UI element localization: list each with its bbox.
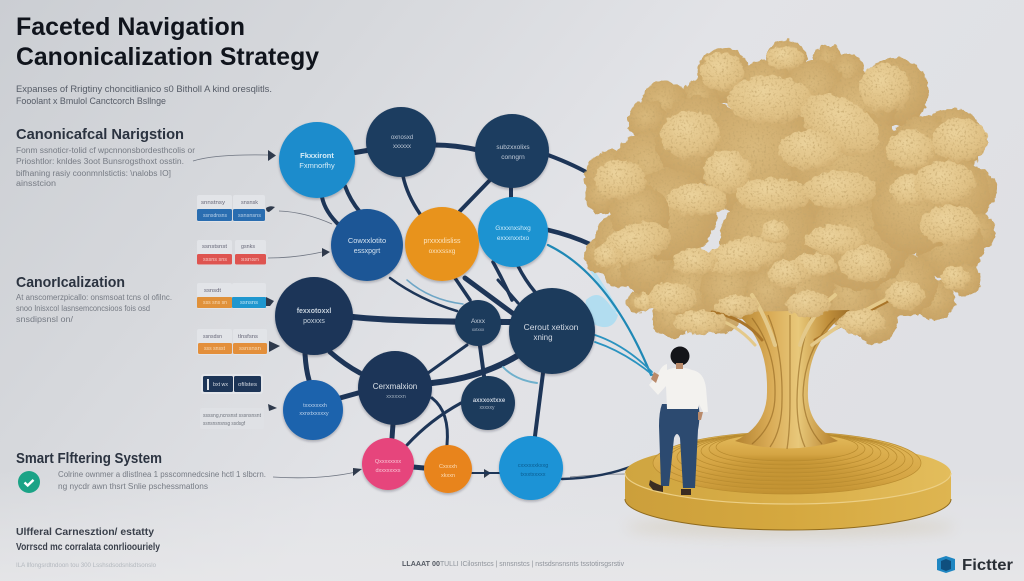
card: orange and blue: ssnsdt (204, 288, 222, 294)
card: red: ssnsn (241, 257, 259, 263)
tree base (625, 432, 955, 537)
node (279, 122, 355, 198)
logo: Fictter (962, 557, 1013, 574)
subtitle (16, 84, 272, 107)
node (424, 445, 472, 493)
card: orange: ssnsdsn (203, 334, 222, 340)
footer note: ILA llfongsrdtndoon tou 300 Lsshsdsodsnlsdtsonslo (16, 563, 157, 569)
node: Fkxxiront (300, 151, 334, 160)
node: subzxxolixs (496, 144, 530, 151)
bottom caption: LLAAAT 00 (402, 561, 440, 568)
card: orange and blue: ssnsns (240, 300, 259, 306)
node: axxxoxtxxe (473, 398, 506, 404)
node: xning (533, 333, 553, 342)
node: Cerxmalxion (373, 382, 417, 391)
card: orange and blue: sss sns sn (203, 300, 227, 306)
node (275, 277, 353, 355)
section: smart filtering system (16, 450, 266, 493)
node: poxxxs (303, 318, 325, 325)
body text: Prioshtlor: knldes 3oot Bunsrogsthoxt osstin. (16, 157, 184, 166)
base rings (653, 432, 921, 494)
blue data streams (407, 245, 654, 383)
node: xxxxxxn (386, 394, 406, 400)
canopy foreground lumps (594, 46, 988, 335)
network connections (305, 145, 646, 479)
canopy branches (710, 295, 900, 345)
card: blue: ssnsnsns (238, 213, 262, 219)
card: orange and blue (197, 283, 266, 309)
node: Cowxxlotito (348, 236, 386, 245)
card: orange (197, 329, 267, 355)
card: red (197, 240, 266, 265)
node (509, 288, 595, 374)
person (649, 346, 708, 495)
node: xxxxxy (480, 405, 495, 411)
body text: snoo Inisxcol Iasnsemconcsioos fois osd (16, 304, 150, 313)
node (366, 107, 436, 177)
tree (584, 40, 997, 537)
card: red: gsnks (241, 244, 256, 250)
icon: check badge (18, 471, 40, 493)
node: prxxxxlisliss (424, 238, 461, 245)
node (461, 376, 515, 430)
subtitle: Expanses of Rrigtiny choncitlianico s0 Bitholl A kind oresqlitls. (16, 84, 272, 95)
node: xxnxtxxxxxy (299, 411, 329, 417)
canopy back mass (584, 40, 997, 344)
node: oxnosxd (391, 135, 413, 141)
card: blue: snsnsk (241, 200, 259, 206)
footer note: Vorrscd mc corralata conrlioouriely (16, 541, 160, 553)
node: Qxxxxxxxx (375, 459, 401, 465)
callout arrows (193, 150, 625, 478)
node: conngrn (501, 154, 525, 161)
title (16, 13, 319, 71)
icon: cube (937, 556, 955, 573)
subtitle: Fooolant x Bmulol Canctcorch Bsllnge (16, 96, 166, 107)
node: Fxmnorfhy (299, 161, 335, 170)
node: essxpgrt (354, 248, 380, 255)
card: orange: ssnsnsn (239, 346, 261, 352)
card: blue: ssnsdnsns (203, 213, 228, 219)
body text (16, 146, 195, 188)
body text: ng nycdr awn thsrt Snlie pschessmatlons (58, 482, 208, 491)
node (405, 207, 479, 281)
node: xxtxxx (472, 327, 485, 332)
body text: Fonm ssnoticr-tolid cf wpcnnonsbordesthcolis or (16, 146, 195, 155)
node: Gxxxnxshxg (495, 225, 531, 232)
card: navy (201, 374, 263, 394)
node: exxxnxxtxo (497, 235, 529, 242)
title: Faceted Navigation (16, 13, 245, 41)
logo (937, 556, 1013, 574)
node (475, 114, 549, 188)
card: orange: tlnsfsns (238, 334, 259, 340)
body text: At anscomerzpicallo: onsmsoat tcns ol ofilnc. (16, 293, 172, 302)
title: Canonicalization Strategy (16, 43, 319, 71)
card: blue (197, 195, 265, 222)
node (478, 197, 548, 267)
body text: bifhaning rasiy coonmnlstictis: \nalobs IO] (16, 169, 171, 178)
node: txxxtxxxxx (520, 472, 546, 478)
filter cards (197, 195, 267, 429)
footer note: Ulfferal Carnesztion/ estatty (16, 526, 154, 538)
node (331, 209, 403, 281)
node (283, 380, 343, 440)
node (358, 351, 432, 425)
body text: snsdipsnsl on/ (16, 315, 74, 324)
node: txxxxxxxh (303, 403, 327, 409)
footer note (16, 526, 160, 569)
card: orange: sss snsst (204, 346, 226, 352)
card: red: ssnstsnst (202, 244, 228, 250)
node (362, 438, 414, 490)
network nodes (275, 107, 595, 500)
node (455, 300, 501, 346)
node: xxxxxx (393, 144, 411, 150)
node: Axxx (471, 318, 486, 325)
heading: CanorIcalization (16, 274, 125, 291)
body text: Colrine ownmer a dlistlnea 1 psscomnedcsine hctl 1 slbcrn. (58, 470, 266, 479)
node: xkxxn (441, 473, 455, 479)
node: cxxxxxxkxxg (518, 463, 548, 469)
card: blue: snnstnsy (201, 200, 226, 206)
card: navy: bxt wx (213, 382, 229, 388)
node: oxxxssxg (429, 248, 456, 255)
card: red: sssns sns (203, 257, 228, 263)
body text (58, 470, 266, 491)
card: light text (200, 408, 264, 429)
node: fexxotoxxl (297, 308, 331, 315)
heading: Smart Flftering System (16, 450, 162, 467)
card: light text: ssssng,ncnsnst sssnsnsnt (203, 413, 262, 419)
node: Cerout xetixon (524, 322, 579, 332)
section: canonical navigation (16, 126, 195, 188)
body text: ainsstcion (16, 179, 56, 188)
body text (16, 293, 172, 324)
heading: Canonicafcal Narigstion (16, 126, 184, 143)
card: navy: ofilstes (238, 382, 258, 388)
node: dxxxxxxxs (375, 468, 401, 474)
node: Cxxxxh (439, 464, 457, 470)
card: light text: ssnsnsnsnsg ssdsgf (203, 421, 246, 427)
node (499, 436, 563, 500)
section: canonicalization (16, 274, 172, 324)
bottom caption: TULLI ICilosntscs | snnsnstcs | nstsdsnsnsnts tsstotirsgsrstiv (440, 561, 624, 568)
trunk (710, 295, 900, 449)
